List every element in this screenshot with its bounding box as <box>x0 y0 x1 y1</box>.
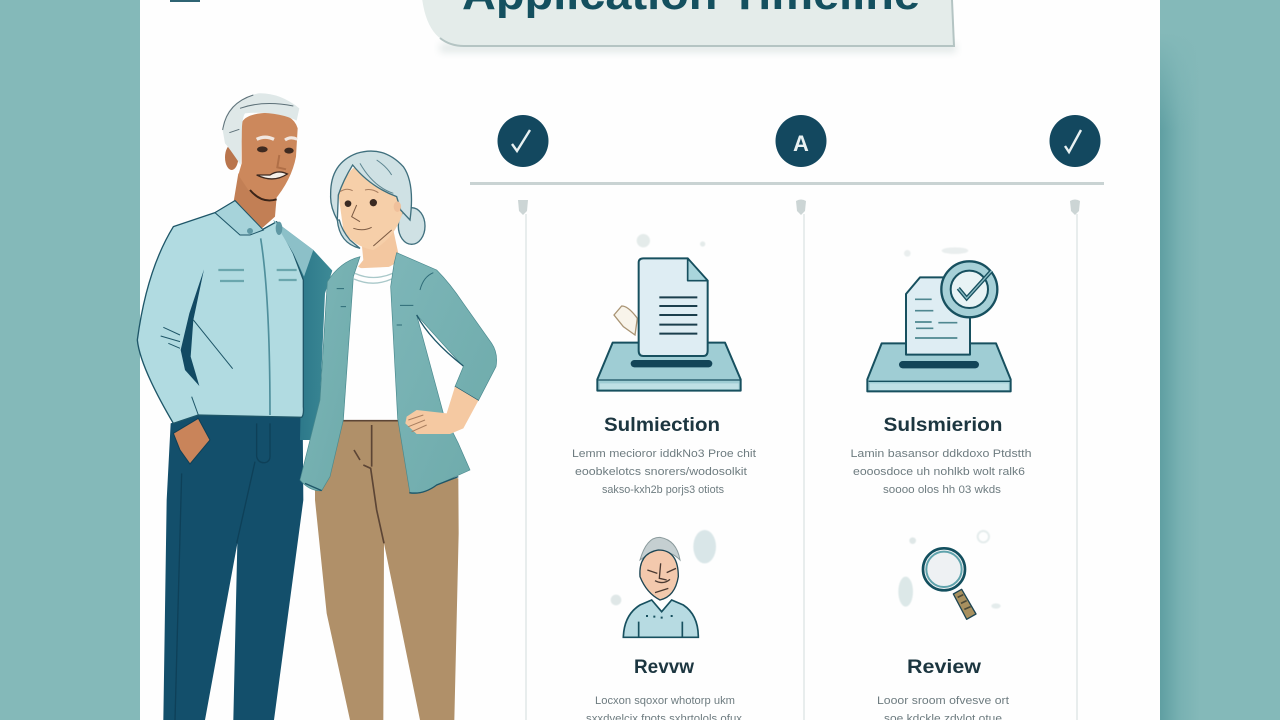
body copy: soooo olos hh 03 wkds <box>883 484 1002 496</box>
marker 3 <box>1050 115 1100 167</box>
body copy <box>850 448 1032 496</box>
woman hand <box>405 387 478 434</box>
title banner <box>422 0 956 52</box>
woman head <box>331 151 425 268</box>
man shirt <box>137 201 313 423</box>
panel shadow <box>1160 0 1200 720</box>
heading: Review <box>907 657 981 678</box>
body copy: Lamin basansor ddkdoxo Ptdstth <box>850 448 1032 460</box>
icon: approved document <box>867 247 1011 391</box>
step: review right <box>877 531 1009 720</box>
woman trousers <box>315 421 459 720</box>
icon: person <box>611 530 716 637</box>
marker 2 <box>776 115 826 167</box>
body copy: Locxon sqoxor whotorp ukm <box>595 695 735 707</box>
woman <box>300 151 497 720</box>
heading: Sulsmierion <box>884 415 1002 436</box>
step: submission left <box>572 234 756 496</box>
heading: Revvw <box>634 657 694 678</box>
heading: Sulmiection <box>604 415 720 436</box>
body copy: Lemm mecioror iddkNo3 Proe chit <box>572 448 756 460</box>
man hand <box>173 418 210 464</box>
fingers <box>408 415 427 432</box>
woman white top <box>343 264 398 418</box>
body copy <box>877 695 1009 720</box>
pin 1 <box>518 200 528 215</box>
body copy: Looor sroom ofvesve ort <box>877 695 1009 707</box>
body copy <box>586 695 743 720</box>
pin 2 <box>796 200 806 215</box>
body copy <box>572 448 756 496</box>
man neck and head <box>222 93 299 230</box>
step: submission right <box>850 247 1032 496</box>
pin 3 <box>1070 200 1080 215</box>
icon: document on tray <box>597 234 741 391</box>
column dividers <box>526 214 1077 720</box>
white panel <box>140 0 1160 720</box>
step: review left <box>586 530 743 720</box>
icon: magnifying glass <box>898 531 1001 619</box>
marker 2: A <box>793 131 809 156</box>
couple illustration <box>137 93 497 720</box>
banner glow <box>440 44 956 52</box>
woman jacket <box>300 253 497 494</box>
body copy: eoobkelotcs snorers/wodosolkit <box>575 466 747 478</box>
man back shoulder <box>273 220 332 440</box>
marker 1 <box>498 115 548 167</box>
shadow fade at top <box>1160 0 1200 130</box>
man trousers <box>163 414 303 720</box>
top-left fragment <box>170 0 200 2</box>
neckline <box>354 273 393 283</box>
banner edge <box>440 0 954 46</box>
timeline rule <box>470 182 1104 185</box>
body copy: eooosdoce uh nohlkb wolt ralk6 <box>853 466 1025 478</box>
banner shape <box>422 0 954 46</box>
body copy: sakso-kxh2b porjs3 otiots <box>602 484 724 496</box>
timeline <box>470 115 1104 720</box>
trouser details <box>342 421 398 543</box>
man <box>137 93 332 720</box>
